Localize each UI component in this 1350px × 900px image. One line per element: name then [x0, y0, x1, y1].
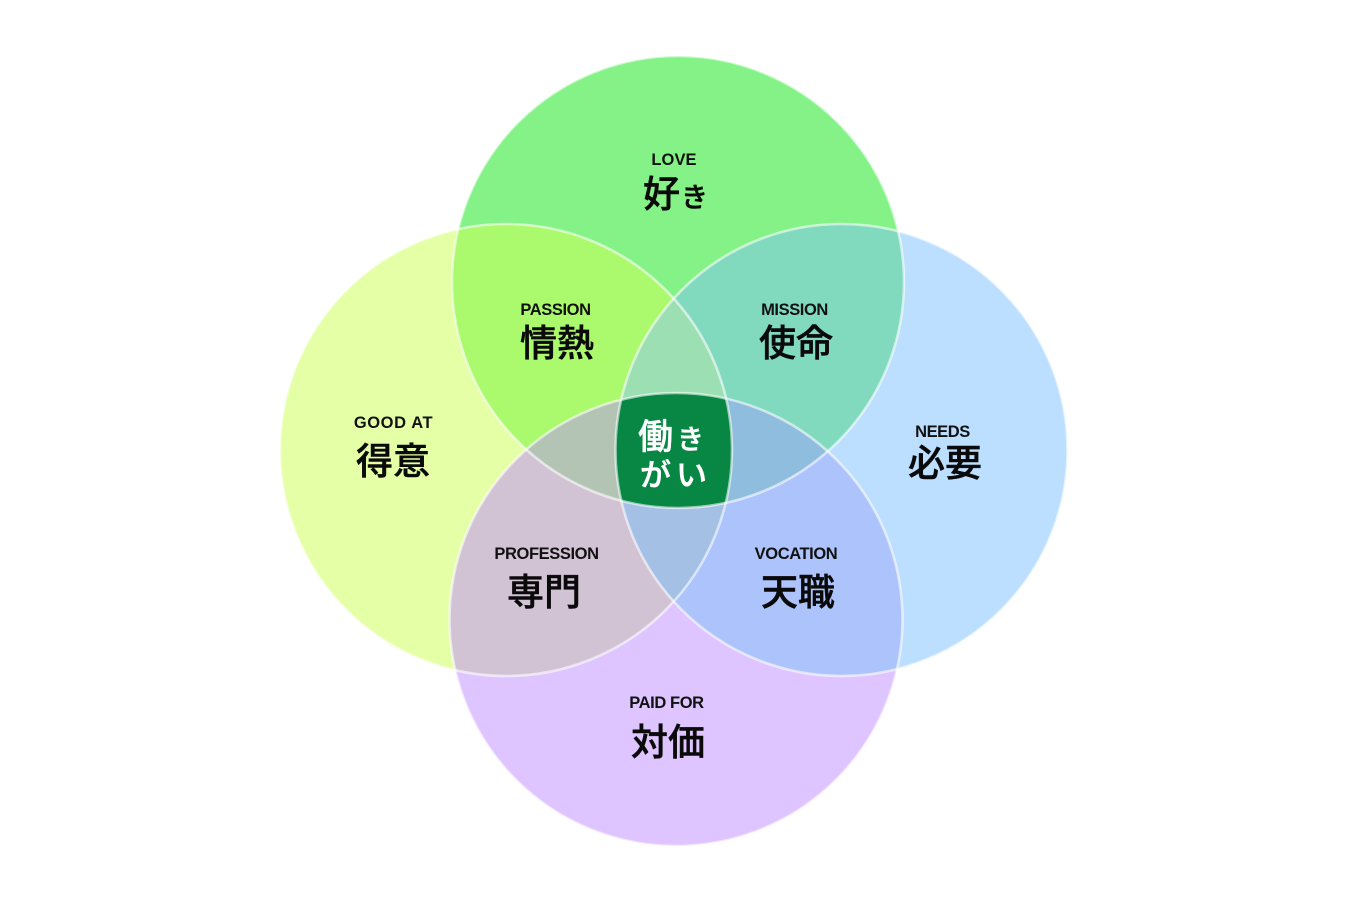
label: profession: 専門 [507, 572, 581, 613]
label: vocation: 天職 [761, 572, 835, 613]
overlap: passion [452, 224, 673, 448]
label: needs: 必要 [908, 443, 982, 484]
label: love: LOVE [651, 151, 697, 169]
label: love [643, 151, 708, 215]
center label: ikigai: 働き [638, 418, 704, 457]
label: needs: NEEDS [915, 423, 970, 441]
label: vocation [755, 545, 837, 613]
circle: love [452, 56, 904, 508]
label: good at: GOOD AT [354, 414, 433, 432]
overlap: love, good at, needs [622, 300, 726, 399]
overlap: vocation [674, 452, 902, 676]
label: love: 好き [643, 174, 708, 215]
label: passion [520, 301, 594, 364]
label: mission: MISSION [761, 301, 828, 319]
center label: ikigai [638, 418, 712, 493]
label: mission: 使命 [759, 323, 833, 364]
center: ikigai [616, 393, 732, 508]
label: vocation: VOCATION [755, 545, 837, 563]
label: profession [494, 545, 599, 613]
label: good at: 得意 [356, 441, 430, 482]
label: paid for: 対価 [631, 722, 705, 763]
venn diagram [280, 56, 1068, 846]
center label: ikigai: がい [640, 458, 712, 493]
label: passion: PASSION [520, 301, 591, 319]
label: mission [759, 301, 833, 364]
overlap: paid for, good at, needs [622, 502, 725, 600]
label: paid for: PAID FOR [629, 694, 704, 712]
circle: good at [280, 224, 732, 676]
label: good at [354, 414, 433, 482]
circle outlines [280, 56, 1068, 846]
label: passion: 情熱 [520, 323, 594, 364]
label: profession: PROFESSION [494, 545, 599, 563]
label: paid for [629, 694, 705, 763]
overlap: profession [450, 400, 673, 676]
overlap: love, paid for, good at [528, 400, 620, 500]
label: needs [908, 423, 982, 484]
circle: needs [616, 224, 1068, 676]
circle: paid for [450, 393, 902, 846]
overlap: love, paid for, needs [726, 400, 826, 502]
overlap: mission [622, 224, 904, 451]
